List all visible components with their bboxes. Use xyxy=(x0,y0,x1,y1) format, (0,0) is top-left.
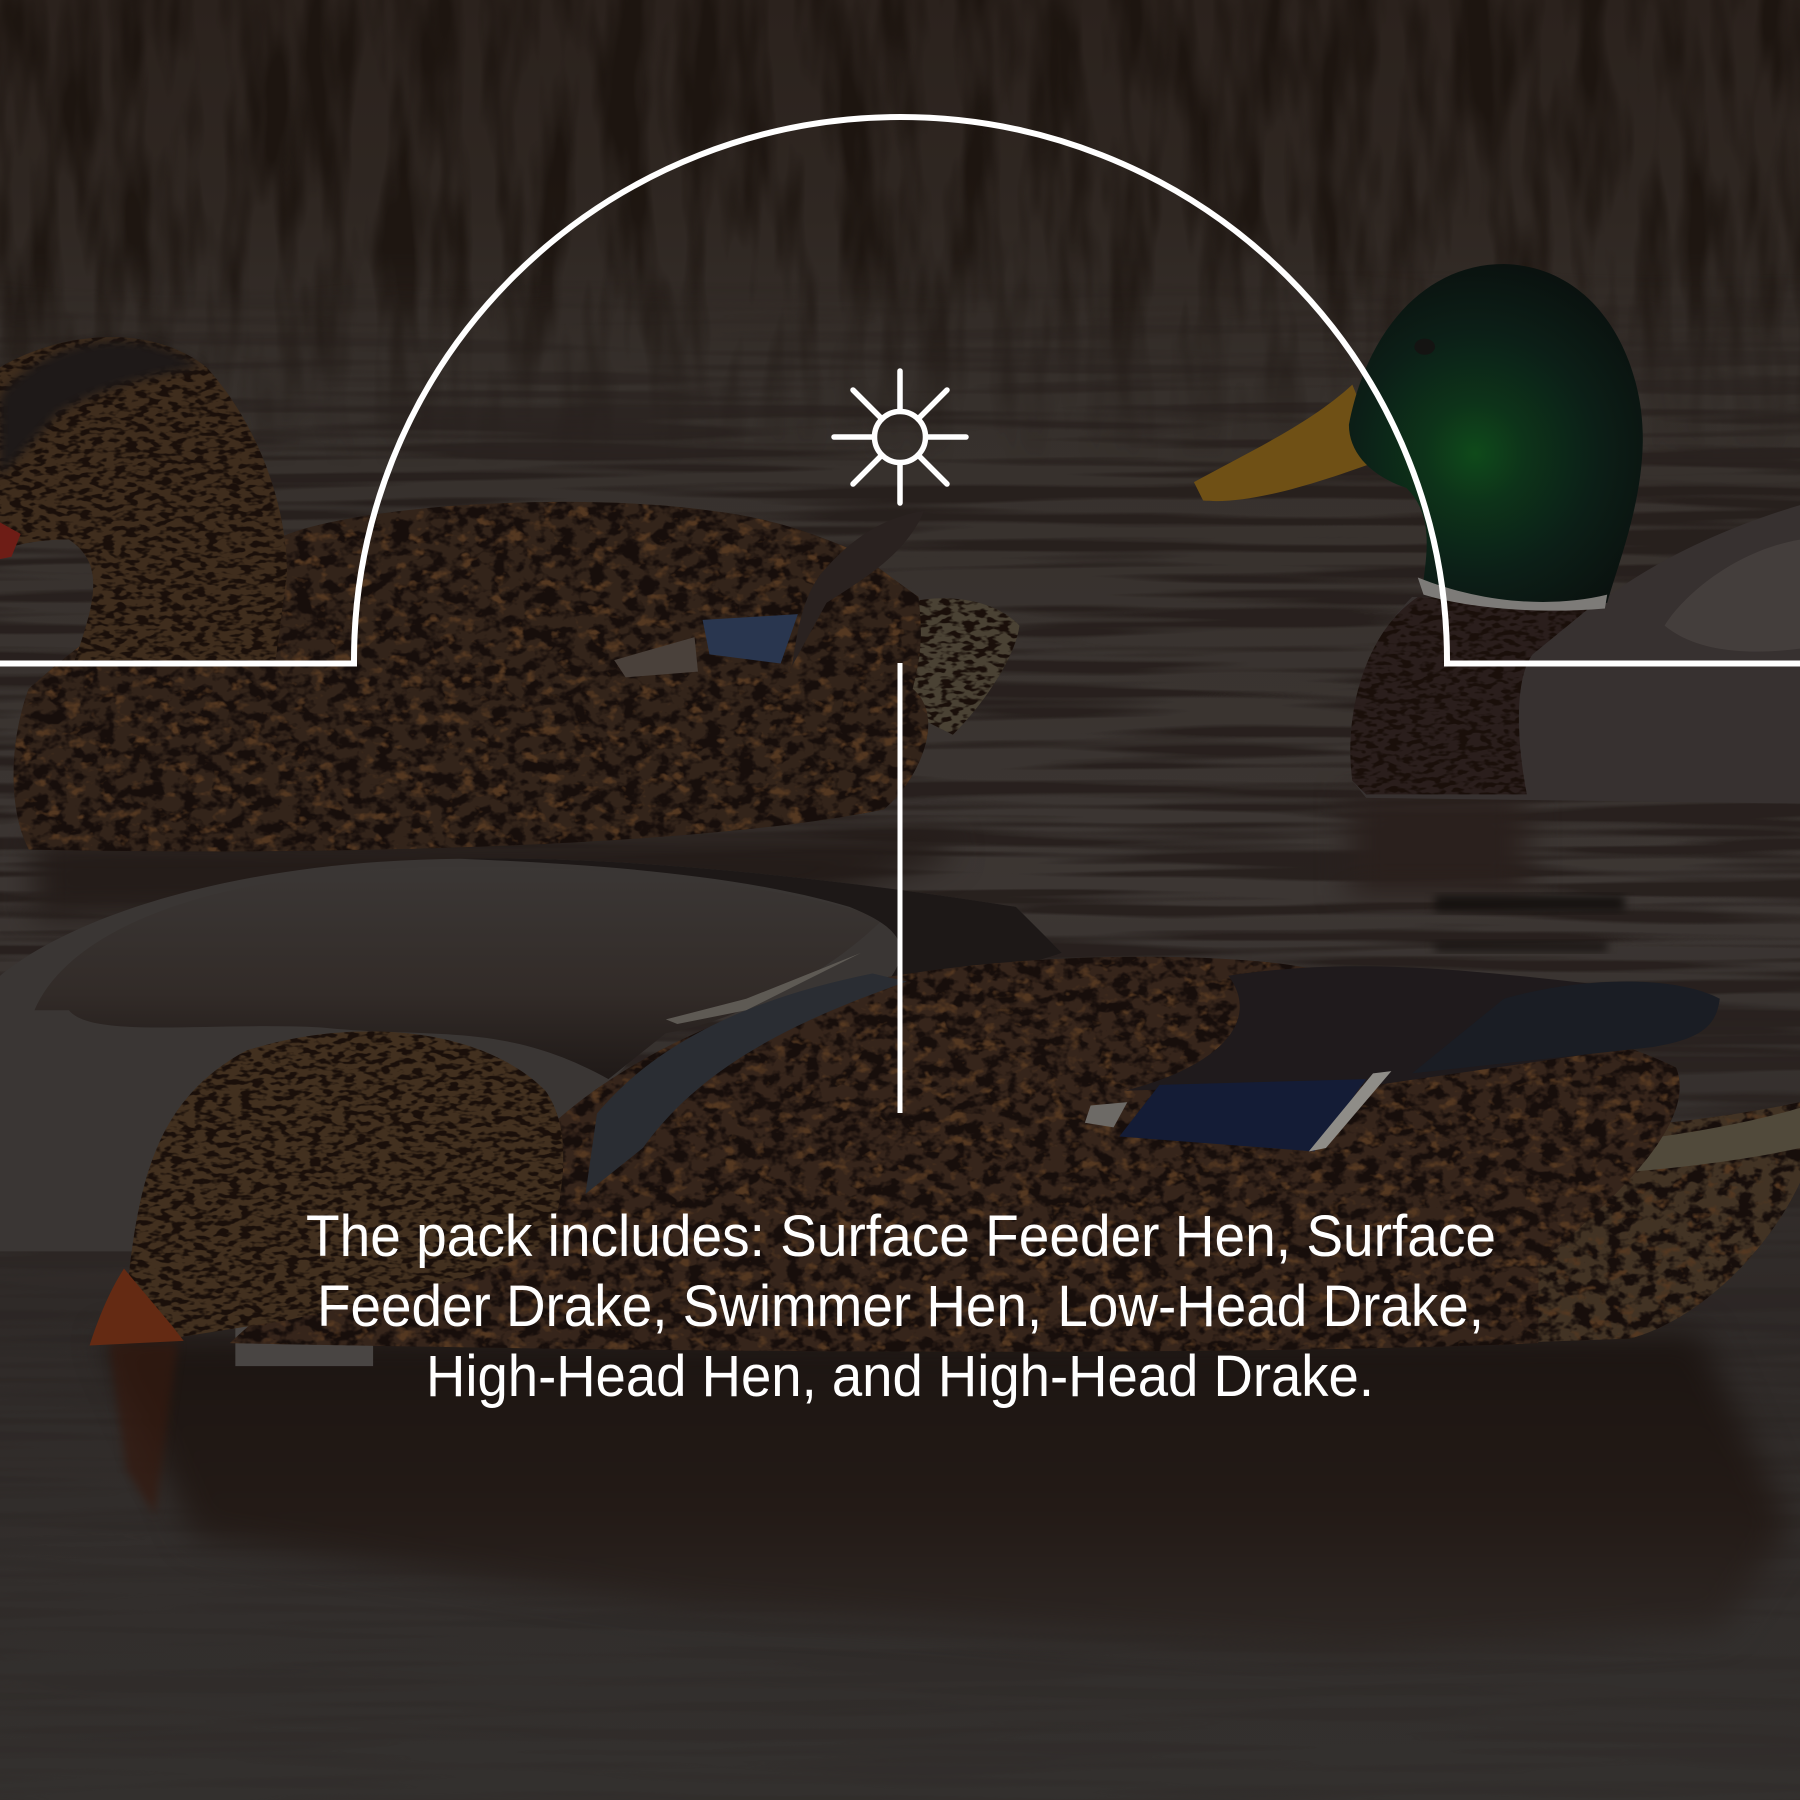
right drake decoy xyxy=(1194,264,1800,952)
arch outline with horizon lines xyxy=(0,117,1800,663)
text block: pack contents: Feeder Drake, Swimmer Hen, Low-Head Drake, xyxy=(317,1274,1484,1339)
text block: pack contents: The pack includes: Surface Feeder Hen, Surface xyxy=(306,1204,1496,1269)
vertical connector line xyxy=(898,663,902,1113)
upper hen decoy xyxy=(0,337,1019,918)
text block: pack contents xyxy=(306,1204,1496,1409)
middle grey drake decoy xyxy=(0,858,1062,1251)
front feeding hen decoy xyxy=(90,957,1800,1653)
text block: pack contents: High-Head Hen, and High-Head Drake. xyxy=(426,1344,1374,1409)
icon: sun xyxy=(834,371,966,503)
